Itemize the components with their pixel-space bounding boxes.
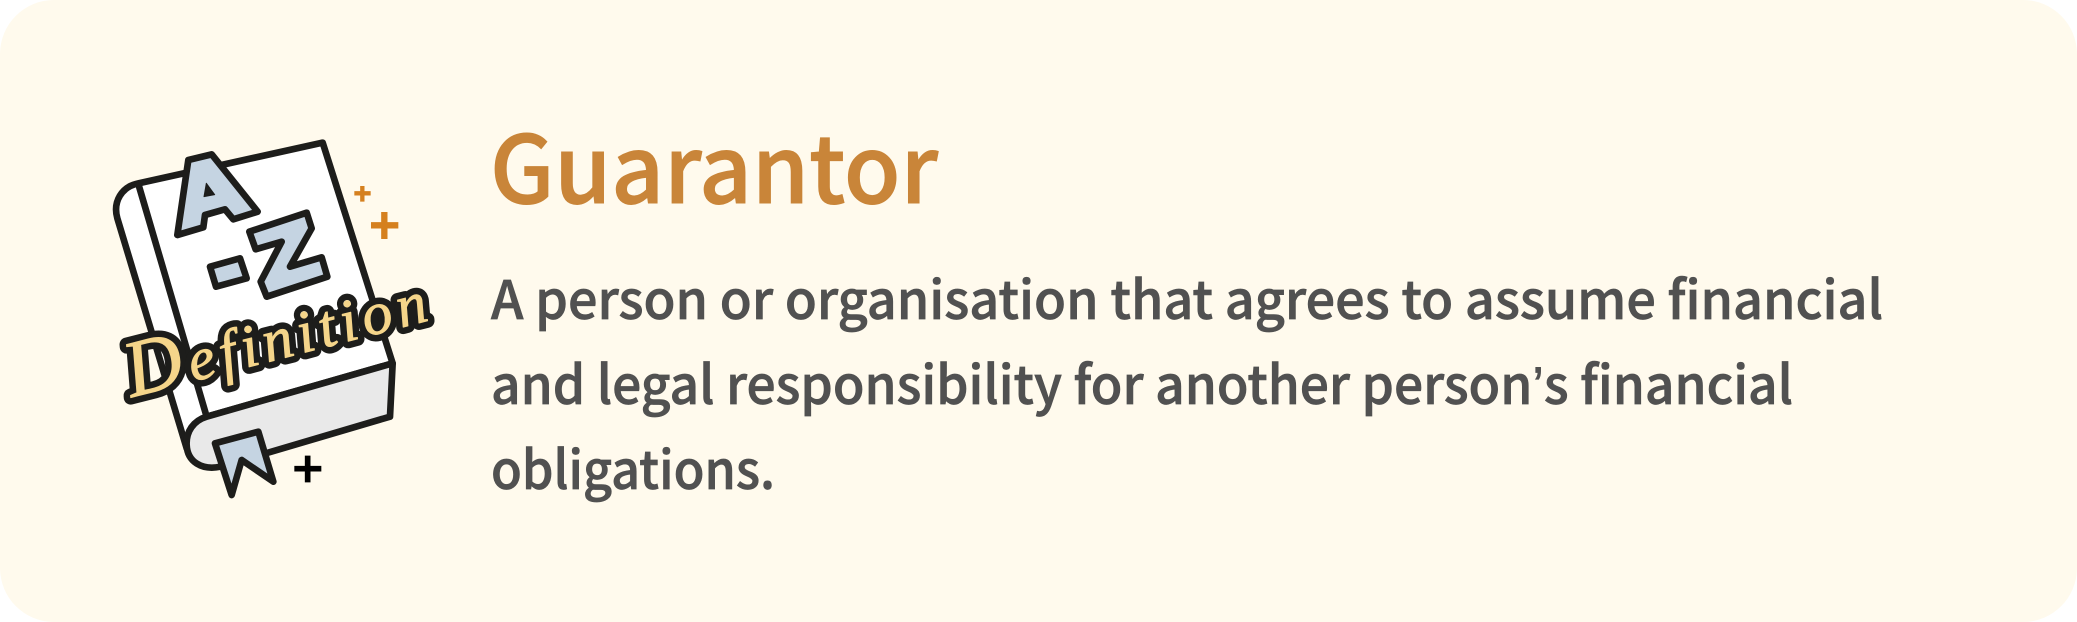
- book pages: [187, 363, 393, 468]
- word: Definition: [113, 252, 435, 415]
- book spine line: [138, 184, 207, 417]
- line 2: and legal responsibility for another person’s financial: [491, 344, 1793, 420]
- Definition fill: Definition: [113, 252, 435, 415]
- book cover: [116, 143, 393, 448]
- bookmark: [215, 432, 273, 495]
- sparkle: black plus: [294, 456, 321, 482]
- sparkle: large orange plus: [371, 212, 398, 239]
- Definition outline: Definition: [113, 252, 435, 415]
- letter Z: [249, 213, 327, 297]
- sparkle: small orange plus: [354, 186, 371, 202]
- line 3: obligations.: [491, 429, 775, 505]
- letter A counter: [204, 183, 215, 197]
- icon: definition book: [113, 143, 435, 495]
- title: Guarantor: [490, 95, 939, 230]
- line 1: A person or organisation that agrees to assume financial: [491, 259, 1883, 335]
- dash: [210, 258, 247, 287]
- letter A: [177, 154, 258, 235]
- definition text: [491, 259, 1883, 505]
